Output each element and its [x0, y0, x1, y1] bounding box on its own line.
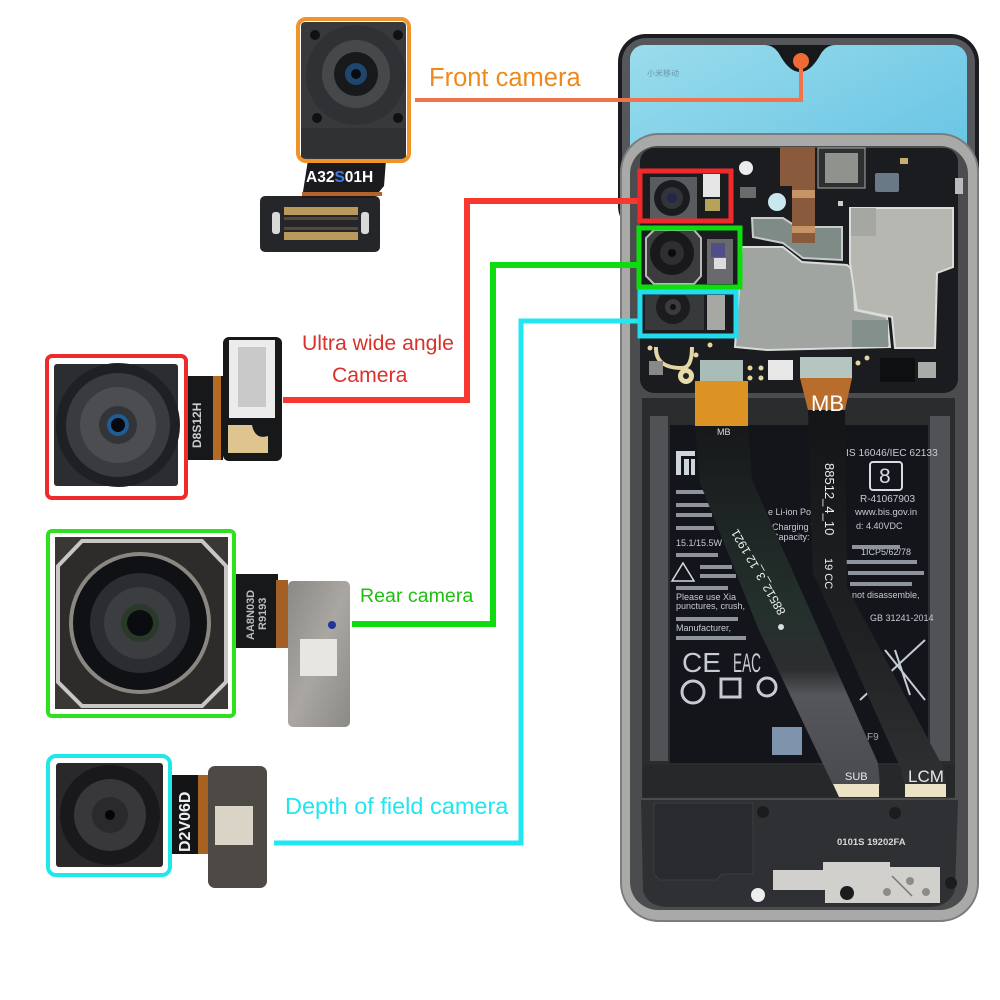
flex cables: MB: [717, 427, 730, 437]
battery: 8: [879, 465, 891, 488]
battery text: EAC: [733, 648, 761, 678]
bottom speaker assembly: [641, 800, 958, 907]
copper flex: [780, 147, 815, 243]
callout: ultra wide angle camera: Ultra wide angle: [302, 332, 454, 355]
callout: ultra wide angle camera: [283, 171, 731, 400]
flex cables: 88512_3_12 1921: [728, 526, 789, 618]
component: ultra wide camera: D8S12H: [190, 403, 204, 448]
flex cables: 88512_4_10: [822, 463, 837, 535]
callout: depth of field camera: [274, 292, 736, 843]
callout: front camera: [415, 53, 809, 100]
upper metal shield: [752, 218, 842, 260]
battery text: 15.1/15.5W: [676, 538, 723, 548]
flex cables: SUB: [845, 771, 868, 783]
battery: F9: [867, 732, 879, 743]
battery: [642, 398, 955, 798]
battery certification icons: [682, 640, 925, 703]
battery text: punctures, crush,: [676, 601, 745, 611]
phone chassis frame: [621, 134, 978, 921]
flex cables: LCM: [908, 767, 944, 786]
big metal shield: [735, 247, 890, 350]
highlight boxes: [47, 19, 409, 875]
battery text: e Li-ion Poly: [768, 507, 818, 517]
battery text: Please use Xia: [676, 592, 736, 602]
component: ultra wide camera: [54, 337, 282, 487]
component: front camera: [260, 22, 406, 252]
battery text: R-41067903: [860, 494, 915, 505]
component: rear camera: [55, 537, 350, 727]
camera modules in phone: [645, 174, 733, 330]
component: depth camera: [56, 763, 267, 888]
component: rear camera: R9193: [257, 598, 269, 630]
chip: [875, 173, 899, 192]
motherboard: [640, 147, 963, 393]
battery text: d: 4.40VDC: [856, 521, 903, 531]
phone: disassembled handset: [618, 34, 979, 921]
battery text: 1ICP5/62/78: [861, 547, 911, 557]
lower board components: [656, 347, 692, 368]
component: depth camera: D2V06D: [177, 792, 194, 852]
battery text: GB 31241-2014: [870, 613, 934, 623]
flex cables: [695, 378, 946, 797]
component: rear camera: AA8N03D: [245, 590, 257, 640]
battery text: www.bis.gov.in: [854, 507, 917, 518]
callout: rear camera: [352, 228, 740, 624]
flex cables: 19 CC: [822, 558, 834, 589]
battery text: Charging V: [772, 522, 817, 532]
battery text: CE: [682, 647, 721, 678]
connector: [260, 196, 380, 252]
callout: ultra wide angle camera: Camera: [332, 364, 408, 387]
right metal shield: [850, 208, 953, 348]
label on flex: A32S01H: [306, 169, 373, 186]
battery text: Manufacturer,: [676, 623, 731, 633]
callout: depth of field camera: Depth of field camera: [285, 793, 509, 819]
battery text: IS 16046/IEC 62133: [846, 448, 938, 459]
battery text: [676, 448, 938, 678]
front camera socket: [818, 148, 865, 188]
flex cables: MB: [811, 391, 844, 416]
callout: rear camera: Rear camera: [360, 585, 473, 607]
phone screen top: [618, 34, 979, 234]
callout: front camera: Front camera: [429, 64, 581, 92]
bottom speaker assembly: 0101S 19202FA: [837, 837, 906, 848]
battery logo and marks: [676, 451, 695, 475]
phone screen top: 小米移动: [647, 68, 679, 78]
battery text: not disassemble,: [852, 590, 920, 600]
battery text: Capacity:: [772, 532, 810, 542]
